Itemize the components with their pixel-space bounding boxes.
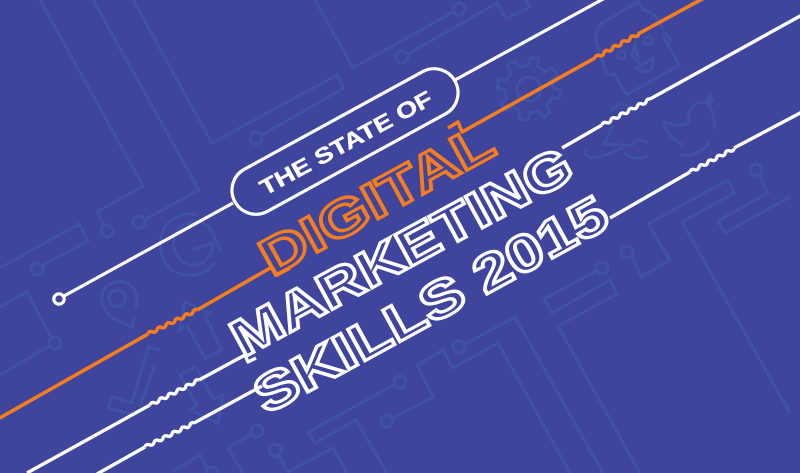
- title: the state of: THE STATE OF: [255, 86, 437, 200]
- icon: twitter bird: [663, 95, 715, 155]
- title: marketing: MARKETING: [221, 136, 583, 369]
- line: third white connector: [97, 112, 800, 473]
- line: top white connector: [54, 0, 605, 304]
- icon: G logo: [160, 214, 222, 275]
- icon: map pin: [102, 282, 137, 327]
- icon: gear: [493, 53, 565, 125]
- title: skills 2015: SKILLS 2015: [244, 185, 618, 426]
- icon: check mark: [108, 347, 160, 415]
- title: digital: DIGITAL: [250, 113, 504, 288]
- icon: down arrow: [180, 366, 223, 423]
- icon: share link: [585, 104, 648, 158]
- icon: face: [596, 2, 679, 95]
- icon: up arrow: [179, 302, 222, 358]
- line: orange connector: [0, 0, 704, 419]
- title pill: [223, 60, 467, 223]
